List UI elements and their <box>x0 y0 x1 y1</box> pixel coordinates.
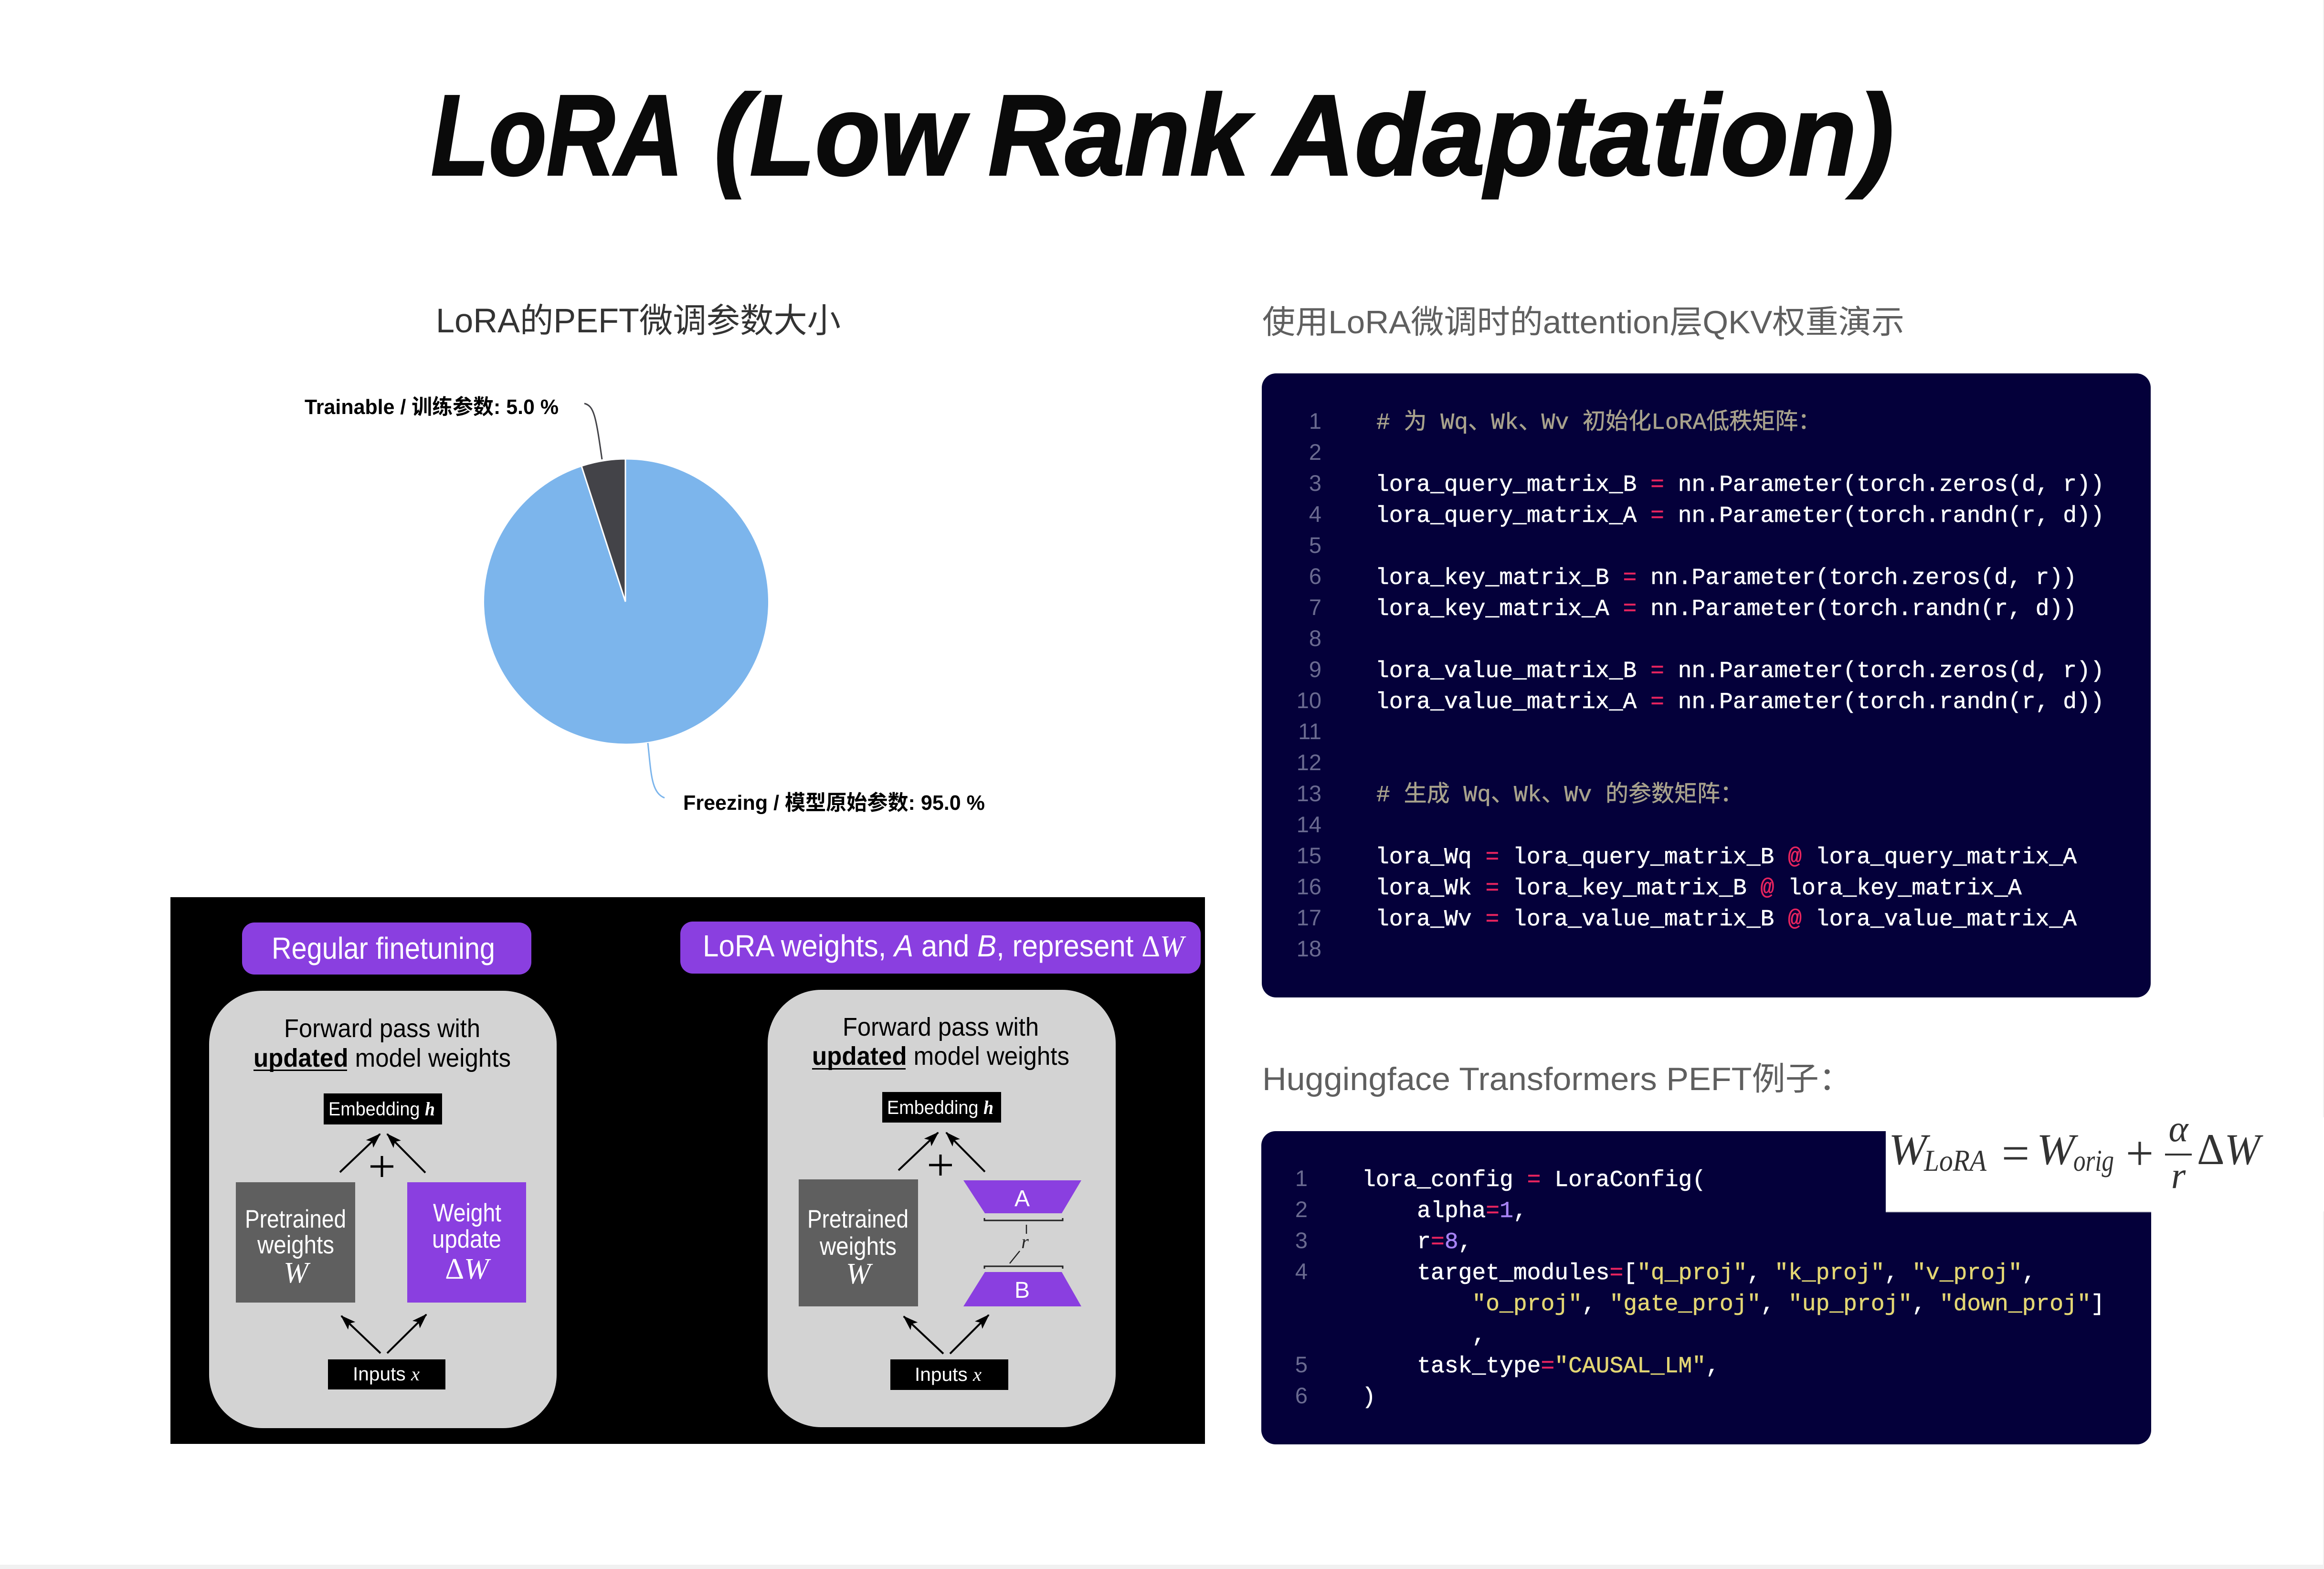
box: weight update: Weight <box>433 1199 501 1227</box>
caption <box>812 1013 1069 1071</box>
line numbers: 15 <box>1297 843 1321 868</box>
box: pretrained weights: weights <box>819 1232 897 1261</box>
box: embedding <box>882 1092 1001 1123</box>
code text: # 生成 Wq、Wk、Wv 的参数矩阵： <box>1376 774 1743 808</box>
line numbers <box>1297 408 1321 961</box>
panel: finetuning diagram <box>170 897 1205 1444</box>
caption <box>254 1014 511 1072</box>
box: inputs: Inputs x <box>353 1363 420 1385</box>
formula: W_LoRA: W <box>2037 1125 2079 1174</box>
title: Adaptation) <box>1272 71 1894 199</box>
line numbers: 5 <box>1309 532 1321 558</box>
box: pretrained weights: Pretrained <box>807 1205 908 1233</box>
line numbers: 3 <box>1295 1228 1308 1253</box>
code text: # 为 Wq、Wk、Wv 初始化LoRA低秩矩阵： <box>1376 402 1821 436</box>
code text: lora_value_matrix_A = nn.Parameter(torch.randn(r, d)) <box>1375 689 2104 715</box>
code text: lora_query_matrix_B = nn.Parameter(torch.zeros(d, r)) <box>1375 472 2104 498</box>
line numbers: 2 <box>1295 1197 1308 1222</box>
line numbers: 2 <box>1309 439 1321 465</box>
formula: W_LoRA: = <box>2002 1126 2029 1181</box>
rank bracket r <box>984 1218 1063 1269</box>
line numbers: 17 <box>1297 905 1321 930</box>
code text: target_modules=["q_proj", "k_proj", "v_proj", <box>1362 1261 2036 1286</box>
formula: W_LoRA: + <box>2126 1126 2154 1181</box>
box: weight update: update <box>432 1225 501 1253</box>
trapezoid: matrix B <box>963 1272 1081 1306</box>
box: pretrained weights <box>799 1179 918 1306</box>
box: inputs <box>890 1359 1008 1390</box>
arrows: from inputs <box>904 1315 989 1354</box>
line numbers: 11 <box>1298 719 1321 744</box>
code panel: LoraConfig <box>1261 1131 2151 1444</box>
pill: LoRA weights: LoRA weights, A and B, represent ΔW <box>703 929 1186 963</box>
line numbers: 18 <box>1297 936 1321 961</box>
code text: lora_key_matrix_A = nn.Parameter(torch.randn(r, d)) <box>1375 596 2077 622</box>
box: inputs: Inputs x <box>915 1364 982 1385</box>
arrows: from inputs <box>341 1315 426 1353</box>
line numbers: 3 <box>1309 470 1321 496</box>
code text: lora_value_matrix_B = nn.Parameter(torch.zeros(d, r)) <box>1375 658 2104 684</box>
line numbers: 13 <box>1297 781 1321 806</box>
code text: , <box>1362 1323 1486 1348</box>
caption: Forward pass with <box>284 1014 480 1043</box>
box: pretrained weights: W <box>284 1257 311 1289</box>
title <box>431 71 1894 199</box>
heading: attention QKV demo: 使用LoRA微调时的attention层QKV权重演示 <box>1262 304 1904 340</box>
code panel: QKV matrices <box>1262 373 2151 997</box>
box: embedding: Embedding h <box>328 1098 435 1120</box>
line numbers: 1 <box>1295 1166 1308 1191</box>
line numbers: 12 <box>1297 750 1321 775</box>
code text: lora_query_matrix_A = nn.Parameter(torch.randn(r, d)) <box>1375 503 2104 529</box>
caption: Forward pass with <box>843 1013 1039 1041</box>
pill: regular finetuning <box>242 922 531 975</box>
line numbers: 10 <box>1297 688 1321 713</box>
line numbers: 8 <box>1309 625 1321 651</box>
code text: lora_Wk = lora_key_matrix_B @ lora_key_matrix_A <box>1375 876 2022 901</box>
formula: W_LoRA: orig <box>2073 1144 2114 1177</box>
line numbers <box>1295 1166 1308 1408</box>
title: LoRA <box>431 71 683 199</box>
heading: PEFT example: Huggingface Transformers PEFT例子 ： <box>1262 1052 1852 1100</box>
caption: updated model weights <box>812 1042 1069 1071</box>
formula: W_LoRA: ΔW <box>2197 1125 2263 1174</box>
box: embedding: Embedding h <box>887 1097 993 1118</box>
code text: ) <box>1362 1385 1376 1410</box>
formula: W_LoRA: W <box>1889 1125 1931 1174</box>
line numbers: 1 <box>1309 408 1321 434</box>
box: embedding <box>324 1093 442 1124</box>
formula: W_LoRA: r <box>2171 1155 2186 1196</box>
title: Rank <box>988 71 1254 199</box>
code text: lora_Wv = lora_value_matrix_B @ lora_value_matrix_A <box>1375 907 2077 933</box>
code text: alpha=1, <box>1362 1198 1527 1224</box>
code text: lora_config = LoraConfig( <box>1362 1167 1706 1193</box>
code text: r=8, <box>1362 1230 1472 1255</box>
line numbers: 14 <box>1297 812 1321 837</box>
panel: regular finetuning flow <box>209 991 557 1428</box>
leader line: trainable <box>584 403 602 459</box>
title: (Low <box>714 71 969 199</box>
code text <box>1375 402 2104 933</box>
box: weight update: ΔW <box>445 1253 491 1285</box>
code text: "o_proj", "gate_proj", "up_proj", "down_proj"] <box>1362 1292 2104 1317</box>
rank bracket r: r <box>1021 1231 1029 1252</box>
line numbers: 6 <box>1295 1383 1308 1408</box>
pill: regular finetuning: Regular finetuning <box>272 931 495 965</box>
formula: W_LoRA <box>1886 1108 2324 1212</box>
formula: W_LoRA: LoRA <box>1923 1144 1987 1177</box>
code text: lora_key_matrix_B = nn.Parameter(torch.zeros(d, r)) <box>1375 565 2077 591</box>
line numbers: 5 <box>1295 1352 1308 1377</box>
line numbers: 4 <box>1309 501 1321 527</box>
trapezoid: matrix A: A <box>1014 1186 1030 1211</box>
plus sign <box>929 1155 952 1176</box>
caption: updated model weights <box>254 1044 511 1072</box>
pie slice: freezing 95% <box>484 459 769 744</box>
plus sign <box>370 1156 393 1177</box>
box: weight update <box>407 1182 526 1303</box>
trapezoid: matrix A <box>963 1180 1081 1213</box>
box: pretrained weights: Pretrained <box>245 1205 346 1233</box>
label: freezing: Freezing / 模型原始参数: 95.0 % <box>683 791 985 815</box>
pie slice: trainable 5% <box>581 459 625 602</box>
panel: LoRA flow <box>768 990 1116 1427</box>
leader line: freezing <box>648 743 665 798</box>
box: pretrained weights: W <box>846 1258 873 1290</box>
arrows: up to embedding <box>898 1133 985 1172</box>
panel: pie chart <box>305 302 985 815</box>
pill: LoRA weights <box>680 922 1201 974</box>
box: pretrained weights <box>236 1182 355 1303</box>
box: inputs <box>328 1359 445 1389</box>
trapezoid: matrix B: B <box>1014 1278 1030 1303</box>
line numbers: 6 <box>1309 563 1321 589</box>
line numbers: 4 <box>1295 1259 1308 1284</box>
code text <box>1362 1167 2104 1410</box>
chart heading: LoRA的PEFT微调参数大小 <box>436 302 841 340</box>
label: trainable: Trainable / 训练参数: 5.0 % <box>305 395 559 419</box>
code text: task_type="CAUSAL_LM", <box>1362 1354 1720 1379</box>
code text: lora_Wq = lora_query_matrix_B @ lora_query_matrix_A <box>1375 845 2077 870</box>
line numbers: 9 <box>1309 657 1321 682</box>
line numbers: 16 <box>1297 874 1321 899</box>
line numbers: 7 <box>1309 594 1321 620</box>
box: pretrained weights: weights <box>257 1231 334 1259</box>
arrows: up to embedding <box>340 1134 425 1173</box>
formula: W_LoRA: α <box>2169 1108 2189 1149</box>
